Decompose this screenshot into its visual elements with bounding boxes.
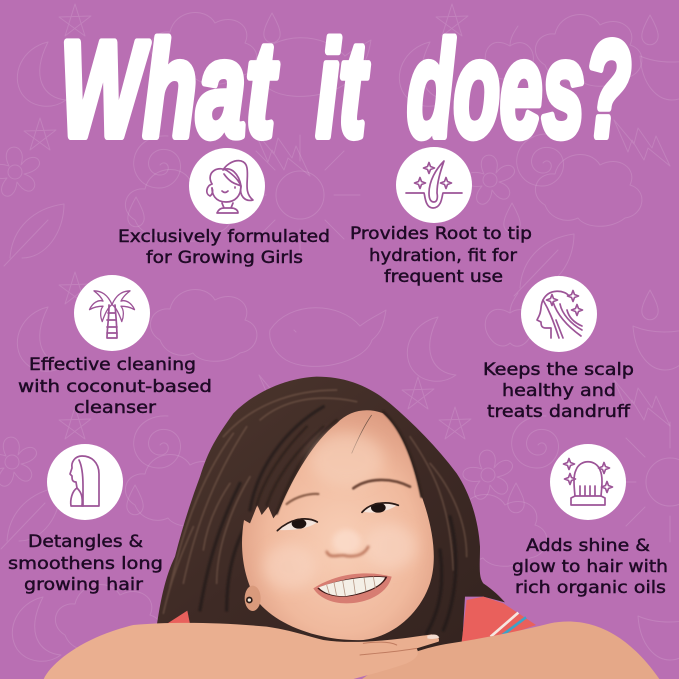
text: shine and glow: rich organic oils [515,578,666,597]
shirt [165,597,536,642]
title: it [316,13,369,165]
feature: detangles [8,444,163,594]
text: growing girls [118,227,330,267]
text: coconut cleanser: cleanser [74,398,156,417]
text: healthy scalp [483,360,634,421]
title [60,13,631,165]
nose [327,530,368,556]
text: detangles: growing hair [24,575,143,594]
text: detangles [8,532,163,594]
text: healthy scalp: healthy and [502,381,616,400]
icon: hair root and sparkles [396,147,472,223]
face [242,410,434,640]
text: root to tip hydration: Provides Root to tip [350,224,532,243]
text: coconut cleanser [18,355,212,417]
left eye [277,519,317,531]
icon: shiny hair with sparkles [550,444,626,520]
icon: girl with ponytail [189,148,265,224]
left eyebrow [287,494,318,504]
icon: palm tree [74,275,150,351]
hair [157,377,505,653]
title: What [60,13,278,165]
photo: smiling girl resting on her arms [43,377,660,679]
feature: shine and glow [512,444,668,597]
arms and hands [43,622,660,679]
feature: growing girls [118,148,330,267]
mouth and teeth [313,573,392,603]
text: detangles: Detangles & [28,532,143,551]
text: healthy scalp: treats dandruff [487,402,631,421]
feature: coconut cleanser [18,275,212,417]
text: shine and glow: Adds shine & [526,536,650,555]
text: shine and glow [512,536,668,597]
feature: root to tip hydration [350,147,532,286]
right eyebrow [353,480,410,488]
feature: healthy scalp [483,276,634,421]
text: healthy scalp: Keeps the scalp [483,360,634,379]
right eye [362,503,398,513]
text: root to tip hydration [350,224,532,286]
text: shine and glow: glow to hair with [512,557,668,576]
icon: woman with long straight hair [47,444,123,520]
text: coconut cleanser: Effective cleaning [29,355,196,374]
text: coconut cleanser: with coconut-based [18,377,212,396]
icon: woman profile with flowing hair [521,276,597,352]
text: growing girls: for Growing Girls [146,248,303,267]
text: growing girls: Exclusively formulated [118,227,330,246]
text: root to tip hydration: frequent use [384,267,503,286]
text: root to tip hydration: hydration, fit for [369,246,517,265]
fringe strands [257,412,422,513]
text: detangles: smoothens long [8,554,163,573]
ear with earring [245,586,261,611]
cheek glow [363,523,417,570]
